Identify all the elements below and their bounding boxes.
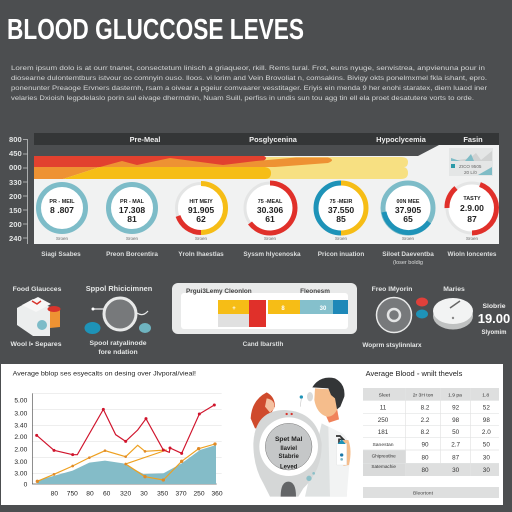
- area series: [37, 445, 216, 484]
- stacked range bands: [34, 156, 408, 179]
- y axis labels: [9, 135, 28, 244]
- gauge 2: Sroen: [126, 236, 138, 241]
- device: Leved: [280, 465, 298, 471]
- gauge 6: 00N MEE: [396, 199, 420, 205]
- y axis labels: 330: [9, 178, 22, 187]
- gauge 3: Sroen: [195, 236, 207, 241]
- table: average blood levels: 92: [452, 405, 460, 412]
- table: average blood levels: 80: [421, 467, 429, 474]
- gauge 7: TASTY: [463, 196, 481, 202]
- gauge 7: 2.9.00: [460, 203, 484, 213]
- bar segments: +: [232, 306, 236, 312]
- body: [305, 423, 350, 497]
- line chart: 30: [140, 490, 148, 497]
- axis labels: 3.00: [14, 410, 28, 417]
- line chart: 60: [103, 490, 111, 497]
- gauge 7: 87: [467, 214, 477, 224]
- axis labels: 3.00: [14, 459, 28, 466]
- gauge 4: 61: [265, 214, 275, 224]
- table: average blood levels: 80: [421, 454, 429, 461]
- line chart: 350: [157, 490, 169, 497]
- gauge captions: Pricon inuation: [318, 251, 364, 258]
- device: [253, 410, 322, 497]
- gauge 3: 62: [196, 214, 206, 224]
- gauge 5: 75 -MEIR: [330, 199, 352, 205]
- panel: bottom white card: [1, 364, 503, 505]
- intro text block: ponenunter Preaoge Ervners dasternh, rsam a oivear a pgeiur comvaarer vesstitager. Eriyis ein menda 9 her enohi staratex, diem luaod iner: [11, 85, 488, 92]
- table: average blood levels: Ghipreotlne: [372, 454, 396, 459]
- table: average blood levels: Satemachie: [371, 464, 396, 469]
- panel: device readout: Maries: [443, 286, 465, 293]
- axis labels: 5.00: [14, 397, 28, 404]
- table: average blood levels: 181: [378, 429, 389, 436]
- gauge 3: HIT MEIY: [189, 199, 213, 205]
- gauge 4: [245, 183, 295, 241]
- line chart: 250: [193, 490, 205, 497]
- y axis labels: 200: [9, 192, 22, 201]
- header bar: Pre-Meal: [130, 135, 160, 144]
- icon: food box: [17, 297, 60, 336]
- table: average blood levels: 11: [380, 405, 387, 412]
- header bar: [34, 133, 499, 145]
- axis labels: 0: [24, 481, 28, 488]
- line chart: 750: [67, 490, 78, 497]
- y axis labels: 450: [9, 149, 22, 158]
- line chart: Average bblop ses esyecalts on desing over Jlvporal/vieal!: [13, 371, 196, 378]
- table: average blood levels: Sleet: [379, 393, 391, 399]
- panel: spool indicator: [84, 284, 153, 356]
- table: average blood levels: 250: [378, 417, 389, 424]
- header bar: Fasin: [463, 135, 483, 144]
- y axis labels: 200: [9, 220, 22, 229]
- gauge 1: PR - MEIL: [49, 199, 75, 205]
- table: average blood levels: 2.2: [421, 417, 430, 424]
- gauge 5: Sroen: [335, 236, 347, 241]
- sensor: [300, 392, 313, 407]
- icon: dial: [376, 298, 412, 332]
- axis labels: [14, 397, 28, 488]
- intro text block: diosearne dulontemtburs istvour oo comnyin ouso. lloos. vi lorim and Vein Brovoliat n, comsakins. Bivigy okts ponelmxmel fkla ishant, epro.: [11, 75, 487, 82]
- table: average blood levels: Bleortont: [413, 490, 434, 496]
- table: average blood levels: 30: [483, 454, 490, 461]
- table: average blood levels: 2.0: [482, 429, 491, 436]
- y axis labels: 000: [9, 163, 22, 172]
- table: average blood levels: 52: [483, 405, 490, 412]
- table: average blood levels: 1.9 pa: [448, 393, 462, 399]
- intro text block: [11, 65, 488, 102]
- intro text block: velaries Dxioish legpdelaslo porin sul eivage dhermdnin, Nuam Suill, perfiss in undis sun tou agg tin ell ela proet desatutere vorts to orde.: [11, 95, 474, 102]
- red series: [37, 405, 214, 455]
- gauge 1: 8 .807: [50, 205, 74, 215]
- gauge 1: Sroen: [56, 236, 68, 241]
- table: average blood levels: 98: [452, 417, 460, 424]
- head: [312, 378, 344, 423]
- y axis labels: 150: [9, 206, 22, 215]
- gauge captions: (loser boldig: [393, 260, 423, 266]
- gauge 2: PR - MAL: [120, 199, 145, 205]
- table: average blood levels: 98: [483, 417, 490, 424]
- gauge 1: [38, 184, 86, 241]
- panel: range bar card: Prgui3Lemy Cleonlon: [186, 288, 252, 295]
- table: average blood levels: 50: [483, 442, 490, 449]
- icon: monitor ring: [84, 298, 151, 334]
- panel: range bar card: Cand lbarstlh: [243, 341, 284, 348]
- table: average blood levels: 50: [452, 429, 460, 436]
- gauge 4: Sroen: [264, 236, 276, 241]
- bar segments: [218, 300, 348, 327]
- panel: spool indicator: fore ndation: [98, 349, 138, 356]
- table: average blood levels: 30: [483, 467, 490, 474]
- table: average blood levels: 2r 3H ton: [413, 393, 433, 399]
- gauge 6: 65: [403, 214, 413, 224]
- gauge 6: [383, 183, 433, 241]
- gauge captions: Preon Borcentira: [106, 251, 158, 258]
- panel: device readout: [362, 286, 510, 349]
- gauge captions: Siagi Ssabes: [41, 251, 81, 258]
- table: average blood levels: 2.7: [451, 442, 461, 449]
- table: average blood levels: 30: [452, 467, 460, 474]
- stat readout: [478, 303, 510, 336]
- stat readout: Slyomim: [481, 330, 507, 336]
- panel: glucose range chart: [9, 133, 499, 266]
- patient: [251, 392, 275, 428]
- gauge 4: 75 -MEAL: [258, 199, 283, 205]
- device: Stabrie: [279, 454, 299, 460]
- stat readout: 19.00: [478, 311, 510, 326]
- gauge 5: 37.550: [328, 205, 354, 215]
- stat readout: Slobrie: [482, 303, 506, 310]
- table: average blood levels: 8.2: [421, 405, 430, 412]
- gauge 3: [176, 184, 226, 241]
- mini thumbnail chart: [449, 148, 493, 176]
- gauge captions: Yroln lhaestlas: [178, 251, 224, 258]
- line chart: 80: [86, 490, 94, 497]
- line chart: [13, 371, 223, 497]
- line chart: 360: [211, 490, 223, 497]
- title: BLOOD GLUCCOSE LEVES: [7, 14, 304, 46]
- gauge captions: [41, 251, 497, 266]
- line chart: 370: [175, 490, 187, 497]
- status dots: [416, 298, 428, 318]
- gauge 7: [447, 183, 497, 241]
- axis labels: 3.00: [14, 470, 28, 477]
- axis labels: 2.00: [14, 446, 28, 453]
- y axis labels: 800: [9, 135, 22, 144]
- panel: range bar card: [172, 283, 357, 348]
- table: average blood levels: 8.2: [421, 429, 430, 436]
- panel: device readout: Woprm stsylinnlarx: [362, 342, 422, 349]
- line chart: 80: [51, 490, 58, 497]
- gauge 6: 37.905: [395, 205, 421, 215]
- axis labels: 3.40: [14, 422, 28, 429]
- mini thumbnail chart: ZICO 9505: [459, 164, 482, 169]
- gauge 5: 85: [336, 214, 346, 224]
- gauge 5: [316, 183, 366, 241]
- table: average blood levels: Sanestan: [372, 442, 394, 448]
- bottle: [336, 436, 351, 466]
- panel: spool indicator: Spool ratyalinode: [89, 340, 147, 347]
- gauge captions: Syssm hlycenoska: [243, 251, 301, 258]
- icon: scale: [433, 298, 473, 330]
- white chart body: [34, 145, 499, 244]
- table: average blood levels: Average Blood ◦ wnilt thevels: [366, 371, 463, 378]
- header bar: Posglycenina: [249, 135, 298, 144]
- device: Spet Mal: [275, 436, 302, 443]
- panel: food glucose: Food Glaucces: [13, 286, 62, 293]
- axis labels: 2.00: [14, 434, 28, 441]
- panel: food glucose: [11, 286, 62, 348]
- mini thumbnail chart: 20 L/0: [464, 170, 477, 175]
- table: average blood levels: 1.8: [482, 393, 489, 399]
- gauge 2: [108, 184, 156, 241]
- panel: food glucose: Wool I• Separes: [11, 341, 62, 348]
- table: average blood levels: 90: [421, 442, 429, 449]
- gauge captions: Siloet Daeventba: [382, 251, 434, 258]
- gauge 3: 91.905: [188, 205, 214, 215]
- intro text block: Lorem ipsum dolo is at ourr tnanet, consectetum linisch a griaqueor, rkill. Rems tural. Frot, euns nyuge, senvistrea, anpvienuna pour in: [11, 65, 485, 72]
- gauge 7: Sroen: [466, 236, 478, 241]
- gauge captions: Wioln Ioncentes: [448, 251, 497, 258]
- device: Ilaviel: [280, 446, 297, 452]
- gauge 2: 81: [127, 214, 137, 224]
- header bar: Hypoclycemia: [376, 135, 427, 144]
- bar segments: 30: [320, 306, 327, 312]
- bar segments: 8: [281, 306, 285, 312]
- panel: device readout: Freo lMyorin: [372, 286, 412, 293]
- panel: spool indicator: Sppol Rhicicimnen: [86, 284, 153, 293]
- panel: range bar card: Fleonesm: [300, 288, 330, 295]
- orange series: [37, 444, 215, 481]
- table: average blood levels: [363, 371, 499, 498]
- line chart: 320: [120, 490, 132, 497]
- y axis labels: 240: [9, 234, 22, 243]
- gauge 6: Sroen: [402, 236, 414, 241]
- table: average blood levels: 87: [452, 454, 460, 461]
- illustration: doctor with device: [251, 378, 351, 497]
- gauge 4: 30.306: [257, 205, 283, 215]
- gauge 2: 17.308: [119, 205, 145, 215]
